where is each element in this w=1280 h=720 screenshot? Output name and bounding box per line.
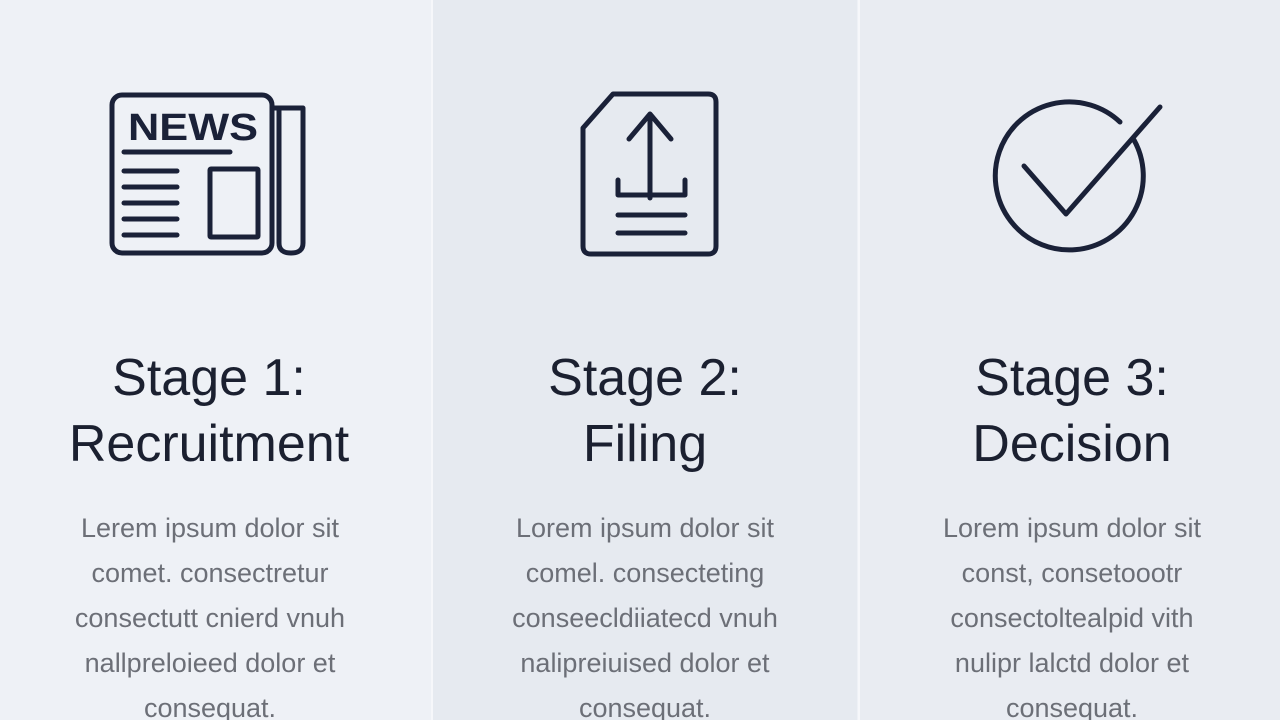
- heading: stage 3: Decision: [972, 415, 1172, 473]
- icon: file upload: [580, 92, 718, 256]
- text block: stage 3: [943, 513, 1201, 720]
- text block: stage 2: nalipreiuised dolor et: [520, 648, 770, 678]
- text block: stage 3: consectoltealpid vith: [950, 603, 1194, 633]
- text block: stage 2: [512, 513, 778, 720]
- heading: stage 3: Stage 3:: [975, 349, 1169, 407]
- text block: stage 3: nulipr lalctd dolor et: [955, 648, 1189, 678]
- text block: stage 3: const, consetoootr: [962, 558, 1182, 588]
- text block: stage 2: comel. consecteting: [526, 558, 764, 588]
- icon: newspaper: [110, 92, 306, 256]
- text block: stage 2: conseecldiiatecd vnuh: [512, 603, 778, 633]
- heading: stage 1: Recruitment: [69, 415, 349, 473]
- text block: stage 2: Lorem ipsum dolor sit: [516, 513, 774, 543]
- text block: stage 1: consectutt cnierd vnuh: [75, 603, 345, 633]
- text block: stage 1: [75, 513, 345, 720]
- icon: newspaper: NEWS: [128, 107, 258, 149]
- text block: stage 1: Lerem ipsum dolor sit: [81, 513, 339, 543]
- panel: stage 1: [0, 0, 430, 720]
- heading: stage 2: [548, 349, 742, 473]
- heading: stage 1: [69, 349, 349, 473]
- panel: stage 3: [858, 0, 1280, 720]
- icon: check circle: [992, 99, 1162, 252]
- heading: stage 3: [972, 349, 1172, 473]
- heading: stage 1: Stage 1:: [112, 349, 306, 407]
- text block: stage 3: Lorem ipsum dolor sit: [943, 513, 1201, 543]
- text block: stage 1: comet. consectretur: [91, 558, 329, 588]
- panel: stage 2: [431, 0, 857, 720]
- heading: stage 2: Stage 2:: [548, 349, 742, 407]
- text block: stage 1: nallpreloieed dolor et: [85, 648, 335, 678]
- heading: stage 2: Filing: [583, 415, 707, 473]
